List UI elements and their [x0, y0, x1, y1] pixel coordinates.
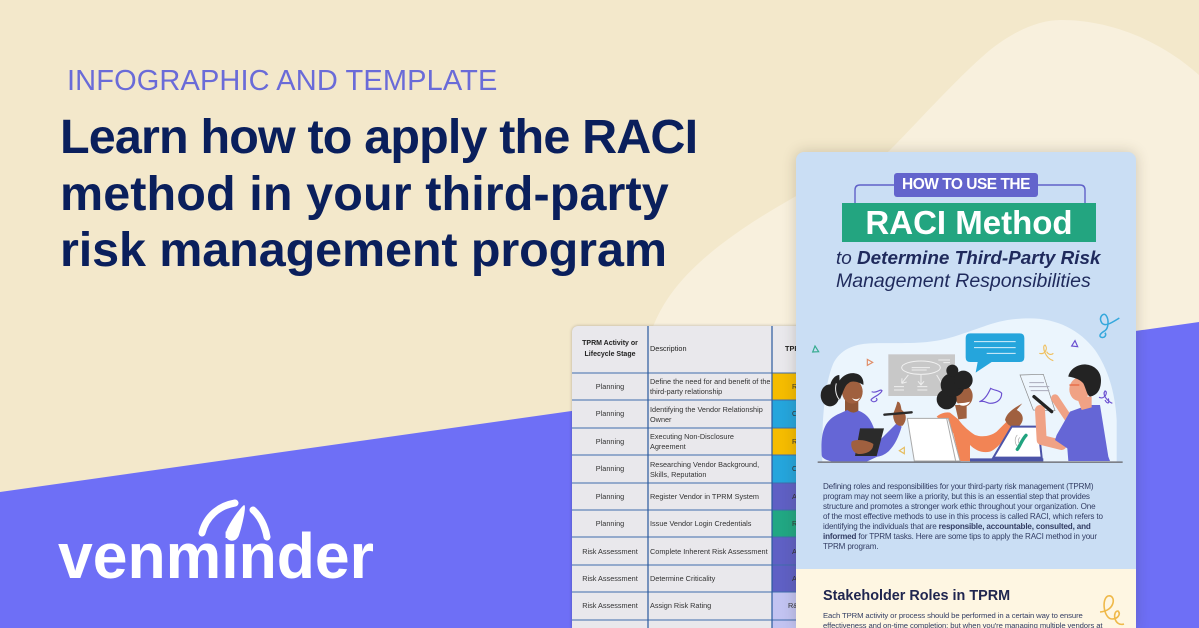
- infographic card: [796, 152, 1136, 628]
- status color cells: [572, 326, 796, 628]
- person right: [1034, 364, 1110, 461]
- spreadsheet table: A: [792, 574, 797, 583]
- spreadsheet table: Planning: [596, 464, 624, 473]
- spreadsheet table: Identifying the Vendor Relationship: [650, 405, 763, 414]
- section text: Each TPRM activity or process should be performed in a certain way to ensure: [823, 611, 1083, 620]
- badge: how to use the: HOW TO USE THE: [902, 176, 1030, 193]
- intro paragraph: TPRM program.: [823, 542, 878, 551]
- spreadsheet table: Risk Assessment: [582, 547, 638, 556]
- squiggle icon: [1100, 595, 1124, 626]
- spreadsheet table: third-party relationship: [650, 386, 722, 396]
- spreadsheet table: Planning: [596, 437, 624, 446]
- intro paragraph: structure and promotes a stronger work ethic throughout your organization. One: [823, 502, 1095, 511]
- spreadsheet table: Risk Assessment: [582, 574, 638, 583]
- header row: Description: [650, 344, 686, 353]
- spreadsheet table: Define the need for and benefit of the: [650, 377, 770, 386]
- section text: [823, 611, 1102, 628]
- spreadsheet table: R: [792, 437, 797, 446]
- spreadsheet table: Planning: [596, 492, 624, 501]
- spreadsheet table: A: [792, 547, 797, 556]
- intro paragraph: informed for TPRM tasks. Here are some tips to apply the RACI method in your: [823, 532, 1097, 541]
- spreadsheet table: Register Vendor in TPRM System: [650, 492, 759, 501]
- spreadsheet table: Executing Non-Disclosure: [650, 432, 734, 441]
- intro paragraph: of the most effective methods to use in this process is called RACI, which refers to: [823, 512, 1103, 521]
- intro paragraph: identifying the individuals that are responsible, accountable, consulted, and: [823, 522, 1091, 531]
- card title group: [836, 173, 1102, 292]
- person left: [821, 373, 912, 462]
- illustration: team meeting: [812, 314, 1123, 463]
- spreadsheet table: Assign Risk Rating: [650, 601, 711, 610]
- main title: risk management program: [60, 223, 667, 277]
- spreadsheet table: [572, 326, 812, 628]
- header row: [582, 340, 806, 358]
- spreadsheet table: C: [792, 409, 797, 418]
- header row: TPRM Activity or: [582, 340, 638, 347]
- wall chart: [888, 354, 955, 396]
- spreadsheet table: Risk Assessment: [582, 601, 638, 610]
- spreadsheet table: R: [792, 519, 797, 528]
- intro paragraph: program may not seem like a priority, but this is an essential step that provides: [823, 492, 1090, 501]
- main title: Learn how to apply the RACI: [60, 110, 697, 164]
- main title: method in your third-party: [60, 166, 669, 220]
- header row: Lifecycle Stage: [585, 350, 635, 358]
- spreadsheet table: Agreement: [650, 442, 686, 450]
- logo: venminder: venminder: [58, 520, 374, 592]
- spreadsheet table: Researching Vendor Background,: [650, 460, 759, 469]
- chair back: [907, 418, 960, 461]
- spreadsheet table: Complete Inherent Risk Assessment: [650, 547, 768, 556]
- intro paragraph: [823, 482, 1103, 551]
- spreadsheet table: Planning: [596, 519, 624, 528]
- badge: how to use the: [894, 173, 1038, 197]
- laptop: [970, 427, 1043, 462]
- spreadsheet table: Planning: [596, 409, 624, 418]
- desk line: [818, 461, 1123, 463]
- spreadsheet table: Issue Vendor Login Credentials: [650, 519, 751, 528]
- section heading: Stakeholder Roles in TPRM: [823, 588, 1010, 604]
- subtitle: [836, 248, 1102, 292]
- row labels: Planning: [596, 382, 624, 391]
- main title: [60, 110, 697, 277]
- partial cell letters: R: [792, 382, 797, 391]
- spreadsheet table: C: [792, 464, 797, 473]
- banner: RACI Method: RACI Method: [865, 204, 1073, 241]
- spreadsheet table: R&: [788, 601, 798, 610]
- spreadsheet table: Skills, Reputation: [650, 470, 706, 478]
- speech bubble: [966, 333, 1024, 373]
- header row: TPRM: [785, 344, 806, 353]
- spreadsheet table: Determine Criticality: [650, 574, 715, 583]
- doodles: [813, 314, 1119, 454]
- subtitle: to Determine Third-Party Risk: [836, 248, 1101, 269]
- person center: [937, 365, 1023, 461]
- spreadsheet table: Owner: [650, 414, 672, 424]
- document: [1020, 374, 1055, 411]
- intro paragraph: Defining roles and responsibilities for your third-party risk management (TPRM): [823, 482, 1093, 491]
- section: stakeholder roles: [796, 569, 1136, 628]
- subtitle: Management Responsibilities: [836, 270, 1091, 292]
- spreadsheet table: A: [792, 492, 797, 501]
- eyebrow heading: INFOGRAPHIC AND TEMPLATE: [67, 65, 497, 97]
